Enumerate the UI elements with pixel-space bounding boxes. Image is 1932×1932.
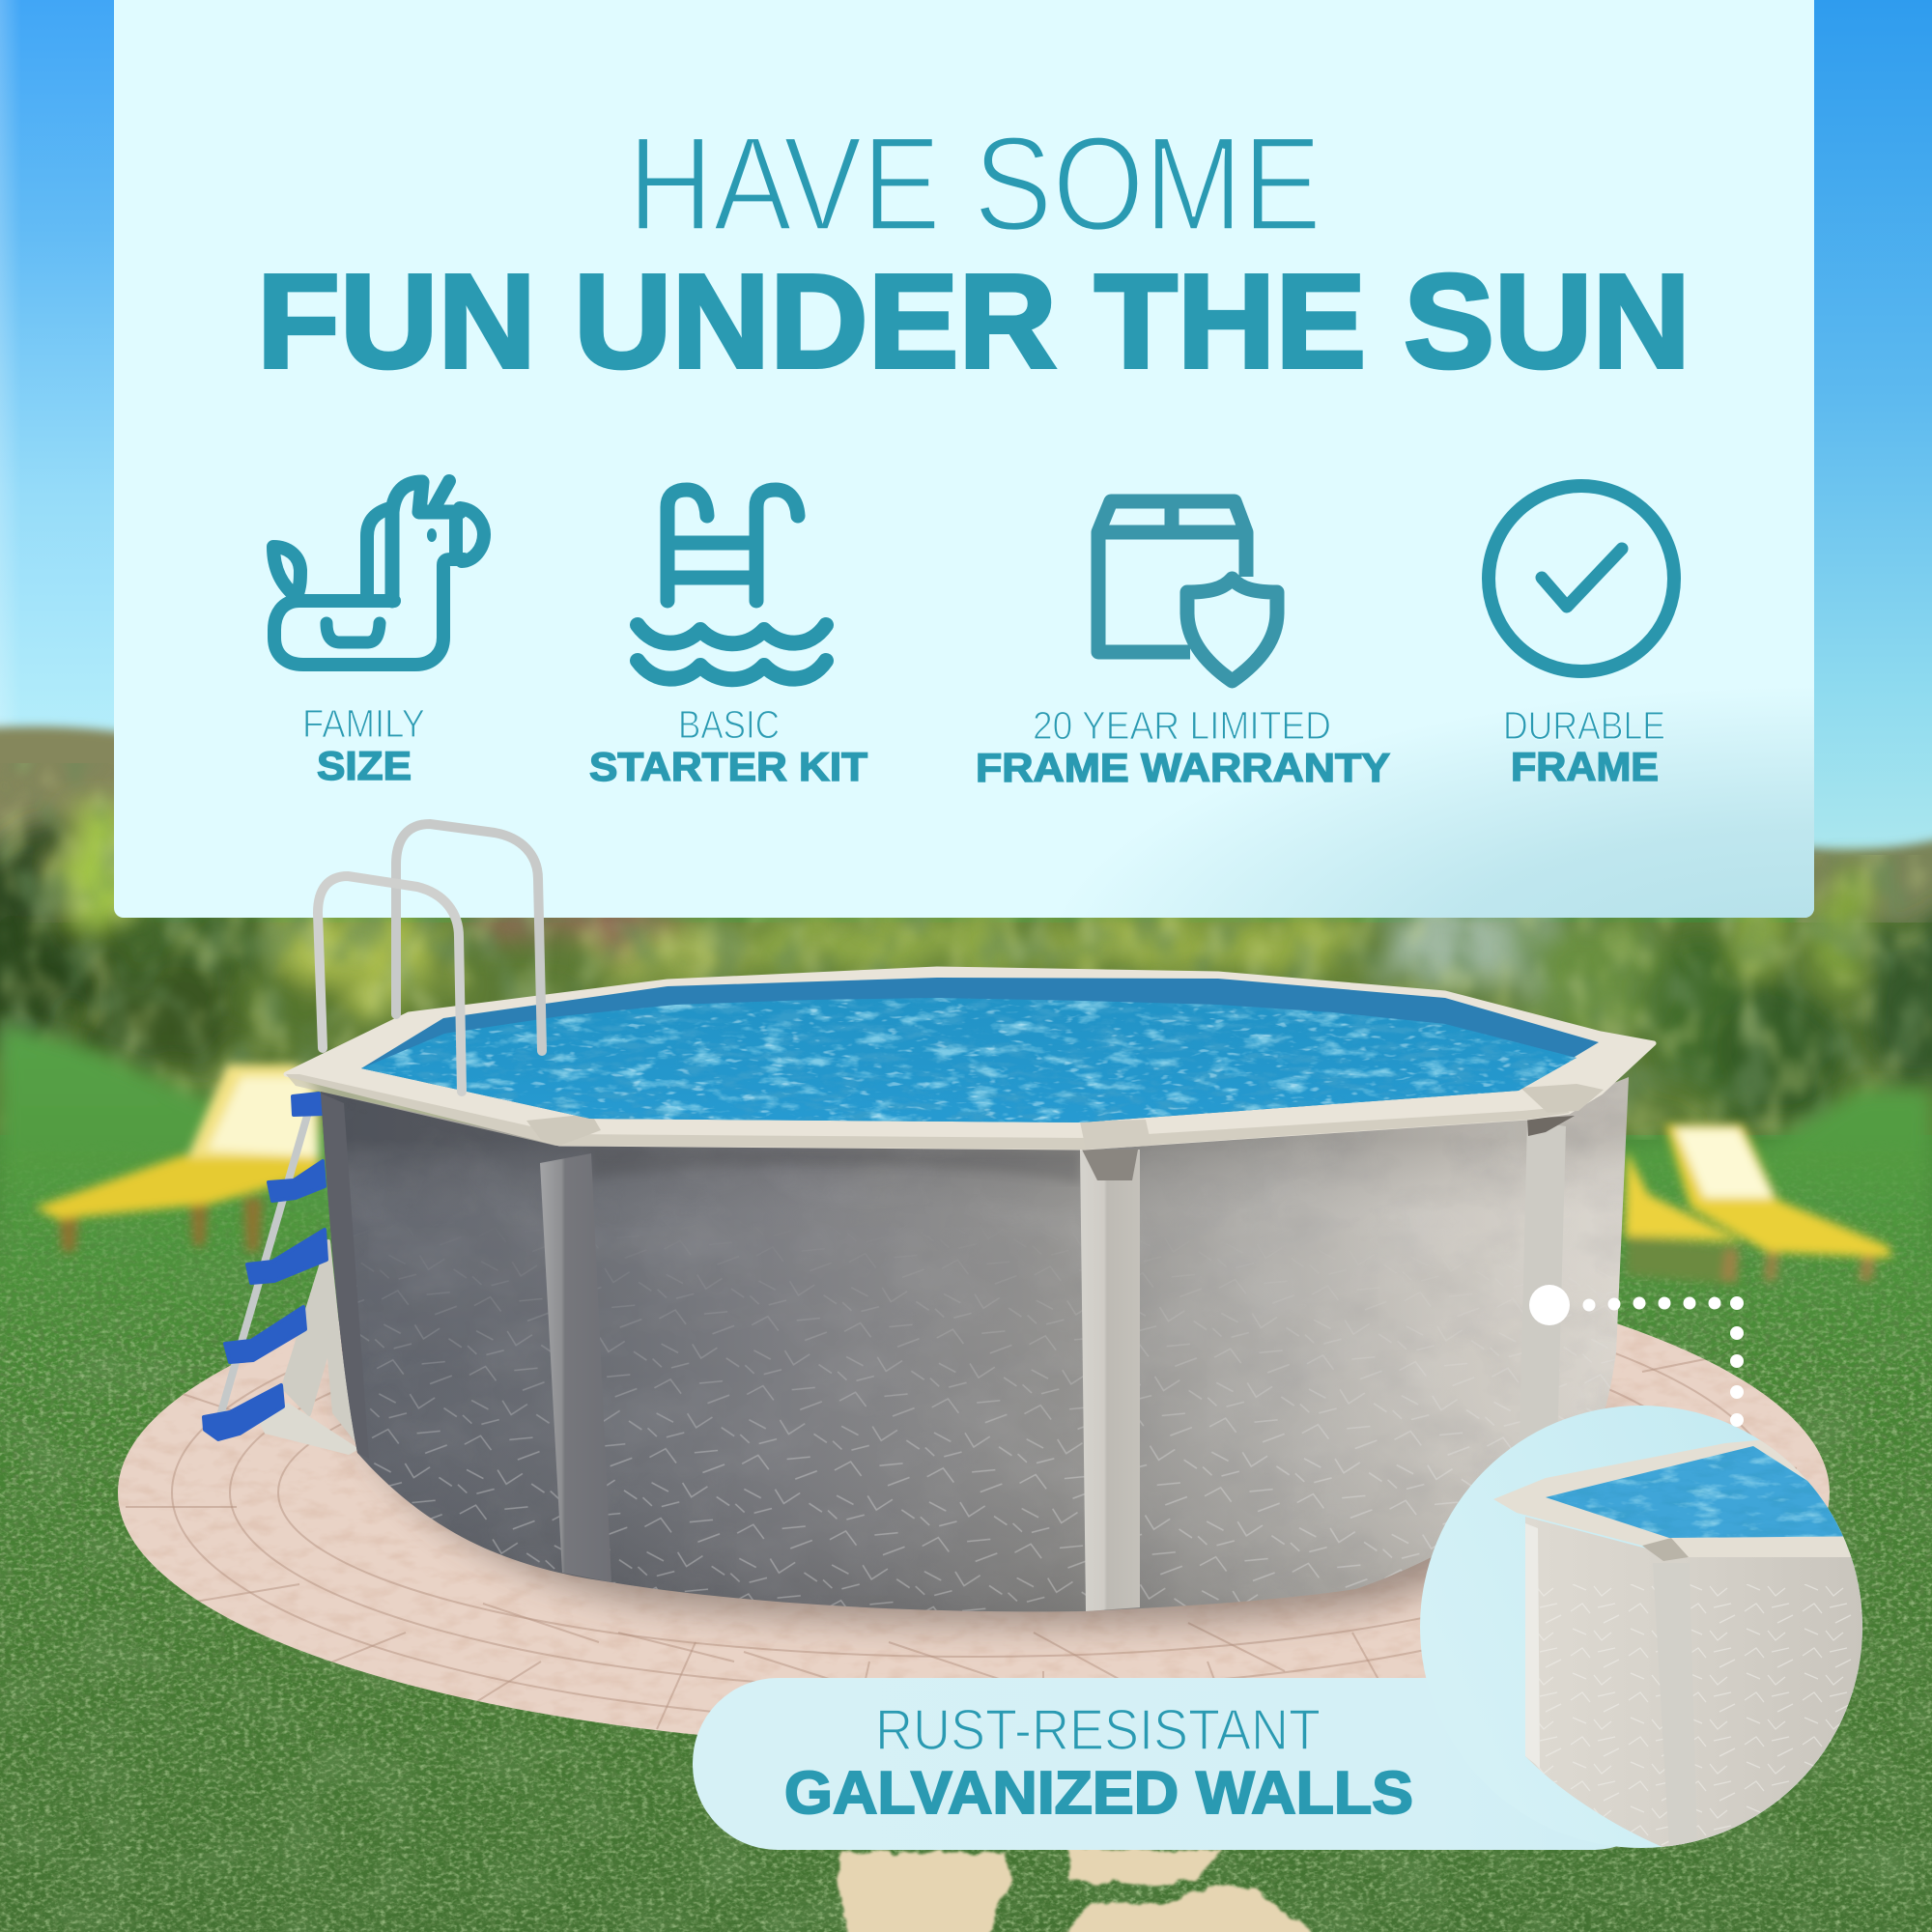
feature: family size <box>273 481 484 788</box>
pool rim <box>286 969 1654 1150</box>
label: durable frame: DURABLE <box>1503 703 1665 748</box>
label: family size: SIZE <box>317 743 412 788</box>
callout connector dots <box>1529 1285 1744 1427</box>
pool handrails <box>318 824 542 1092</box>
sun loungers <box>35 1065 1891 1285</box>
label: basic starter kit: STARTER KIT <box>589 744 867 789</box>
icon: inflatable float <box>273 481 484 665</box>
label: family size <box>302 701 425 788</box>
feature: basic starter kit <box>589 490 867 789</box>
pool ground shadow <box>338 1372 1623 1625</box>
callout text: GALVANIZED WALLS <box>784 1760 1413 1827</box>
feature: durable frame <box>1489 486 1674 789</box>
background: lawn <box>0 966 1932 1932</box>
stepping stones <box>838 1850 1320 1932</box>
callout: rust-resistant galvanized walls <box>693 1406 1862 1850</box>
label: frame warranty: 20 YEAR LIMITED <box>1033 703 1331 748</box>
wall shading and embossed texture <box>309 1072 1642 1623</box>
icon: pool ladder and waves <box>638 490 826 679</box>
feature: frame warranty <box>976 501 1390 790</box>
pool <box>204 824 1654 1625</box>
icon: box with shield <box>1098 501 1277 681</box>
wall posts <box>321 1094 1575 1611</box>
background: hills and blurred trees <box>0 726 1932 1140</box>
title line 2: FUN UNDER THE SUN <box>257 247 1690 396</box>
label: basic starter kit: BASIC <box>678 702 780 747</box>
pool wall <box>321 1077 1629 1611</box>
callout text <box>784 1698 1413 1827</box>
title <box>257 109 1690 396</box>
callout text: RUST-RESISTANT <box>875 1698 1321 1762</box>
pool liner <box>361 978 1599 1122</box>
pool ladder: outer <box>204 1094 359 1455</box>
label: frame warranty <box>976 703 1390 790</box>
label: durable frame <box>1503 703 1665 789</box>
label: frame warranty: FRAME WARRANTY <box>976 745 1390 790</box>
callout disc with pool close-up <box>1420 1406 1862 1848</box>
pool water <box>357 995 1584 1130</box>
label: family size: FAMILY <box>302 701 425 746</box>
brick patio <box>118 1321 1830 1735</box>
icon: check circle <box>1489 486 1674 671</box>
panel: header card <box>114 0 1814 918</box>
title line 1: HAVE SOME <box>628 109 1321 259</box>
callout pill <box>693 1678 1678 1850</box>
label: durable frame: FRAME <box>1511 744 1659 789</box>
label: basic starter kit <box>589 702 867 789</box>
background: sky <box>0 0 1932 869</box>
